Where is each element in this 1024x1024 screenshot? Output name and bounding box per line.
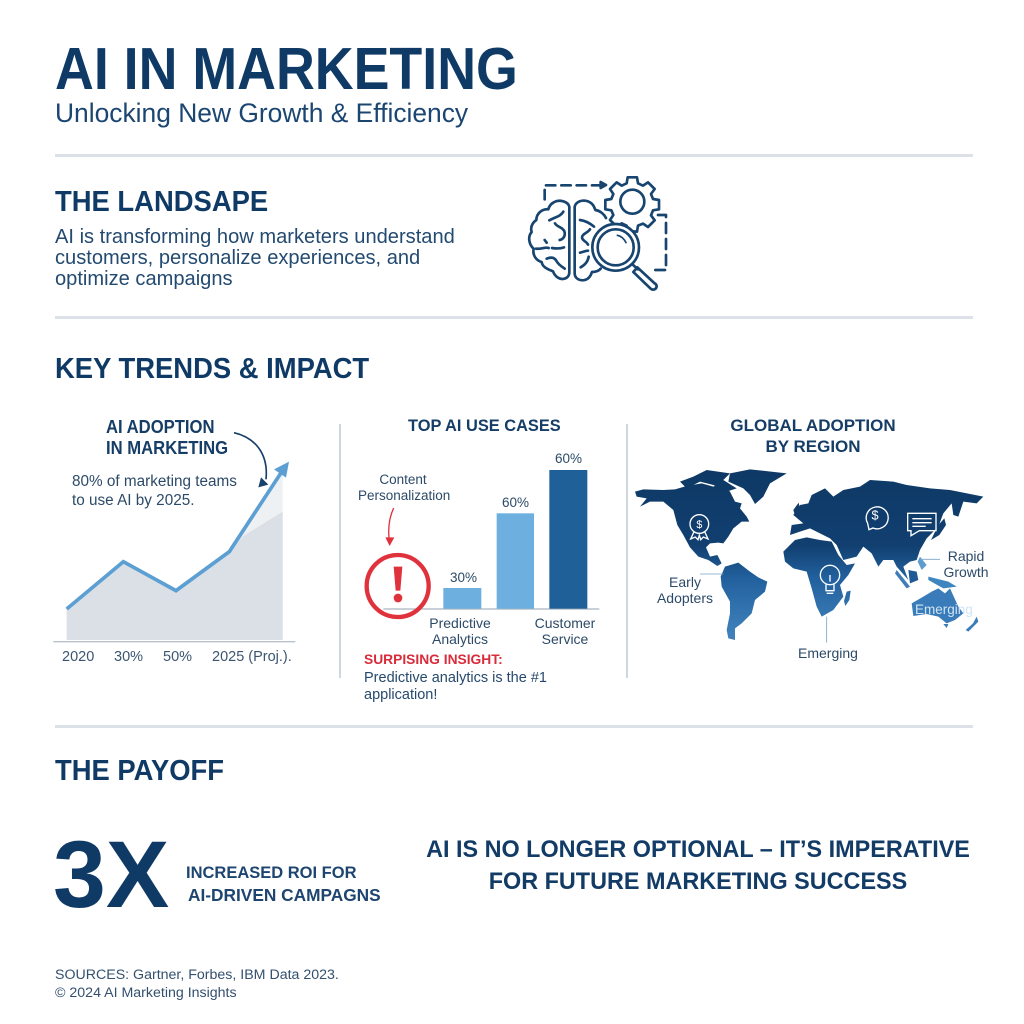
label: rapid growth: Growth (943, 564, 989, 580)
North America (635, 483, 749, 566)
icon: light bulb (820, 565, 840, 593)
UK (793, 503, 800, 517)
SE Asia islands (895, 570, 910, 588)
heading: the payoff: THE PAYOFF (55, 755, 224, 787)
bar category: customer service: Service (542, 630, 588, 646)
insight text: Predictive analytics is the #1 (364, 670, 547, 686)
panel: top AI use cases (358, 417, 600, 702)
callout text: to use AI by 2025. (72, 492, 194, 509)
chart heading: TOP AI USE CASES (408, 417, 561, 435)
chart heading: AI ADOPTION (106, 417, 215, 437)
Greenland (728, 469, 787, 504)
sources: © 2024 AI Marketing Insights (55, 985, 237, 1001)
world map (635, 469, 984, 643)
Japan (931, 518, 946, 540)
annotation: content personalization: Content (379, 472, 427, 487)
icon: dollar bubble: $ (871, 508, 879, 522)
bar category: customer service (535, 615, 596, 646)
panel: AI adoption in marketing: 30% (114, 649, 143, 665)
label: early adopters: Early (669, 574, 701, 590)
Eurasia (790, 480, 983, 580)
line chart (53, 432, 296, 642)
text block: landscape description: AI is transforming how marketers understand (55, 226, 455, 248)
bar value labels: 30% (450, 570, 477, 585)
New Zealand (966, 617, 978, 632)
South America (721, 563, 767, 640)
icon: dollar bubble (866, 507, 888, 530)
chart heading (106, 417, 228, 458)
icon: brain, gear and magnifier (528, 176, 668, 291)
Arctic islands (680, 470, 737, 492)
label: emerging on Australia: Emerging (915, 602, 973, 617)
bar category: predictive analytics (429, 615, 491, 647)
insight text (364, 670, 547, 702)
chart heading: BY REGION (765, 437, 861, 456)
bar category: predictive analytics: Predictive (429, 615, 491, 631)
chart heading (730, 416, 896, 456)
panel: AI adoption in marketing: 50% (163, 649, 192, 665)
bar category: predictive analytics: Analytics (432, 630, 488, 646)
closing statement: FOR FUTURE MARKETING SUCCESS (489, 868, 907, 895)
chart heading: GLOBAL ADOPTION (730, 416, 896, 435)
callout text: 80% of marketing teams (72, 473, 237, 490)
icon: message (908, 513, 936, 536)
stat: 3X: 3X (53, 822, 169, 928)
chart axis labels: 2020 (62, 649, 94, 665)
surprising insight: SURPISING INSIGHT: (364, 652, 503, 667)
closing statement (426, 836, 970, 895)
annotation: content personalization: Personalization (358, 488, 450, 502)
heading: key trends and impact: KEY TRENDS & IMPACT (55, 353, 369, 385)
panel: global adoption by region (635, 416, 989, 661)
label: early adopters (657, 574, 713, 606)
icon: dollar badge: $ (696, 519, 702, 531)
panel: top AI use cases: 60% (555, 451, 582, 466)
bar category: customer service: Customer (535, 615, 595, 631)
heading: the landscape: THE LANDSAPE (55, 186, 268, 218)
bar chart (364, 470, 600, 620)
text block: landscape description (55, 226, 455, 290)
panel: top AI use cases: 60% (502, 495, 529, 510)
label: rapid growth: Rapid (948, 548, 984, 564)
stat caption: INCREASED ROI FOR (186, 864, 357, 882)
annotation: content personalization (358, 472, 450, 502)
stat caption: AI-DRIVEN CAMPAGNS (188, 885, 381, 905)
Africa (783, 537, 855, 617)
label: rapid growth (943, 548, 989, 580)
closing statement: AI IS NO LONGER OPTIONAL – IT’S IMPERATIVE (426, 836, 970, 863)
Madagascar (844, 591, 851, 606)
text block: landscape description: optimize campaigns (55, 268, 233, 290)
map icons (690, 507, 936, 593)
Australia (912, 588, 963, 623)
subtitle: Unlocking New Growth & Efficiency (55, 98, 468, 128)
panel: AI adoption in marketing (53, 417, 296, 665)
icon: dollar badge (690, 515, 709, 540)
panel: AI adoption in marketing: 2025 (Proj.). (212, 649, 292, 665)
label: emerging: Emerging (798, 645, 858, 661)
text block: landscape description: customers, personalize experiences, and (55, 247, 420, 269)
sources (55, 967, 339, 1001)
sources: SOURCES: Gartner, Forbes, IBM Data 2023. (55, 967, 339, 983)
label: early adopters: Adopters (657, 590, 713, 606)
insight text: application! (364, 686, 437, 702)
chart heading: IN MARKETING (106, 438, 228, 458)
stat caption (186, 864, 381, 905)
callout text (72, 473, 237, 509)
title: AI IN MARKETING (55, 36, 518, 102)
leader lines (700, 559, 940, 643)
